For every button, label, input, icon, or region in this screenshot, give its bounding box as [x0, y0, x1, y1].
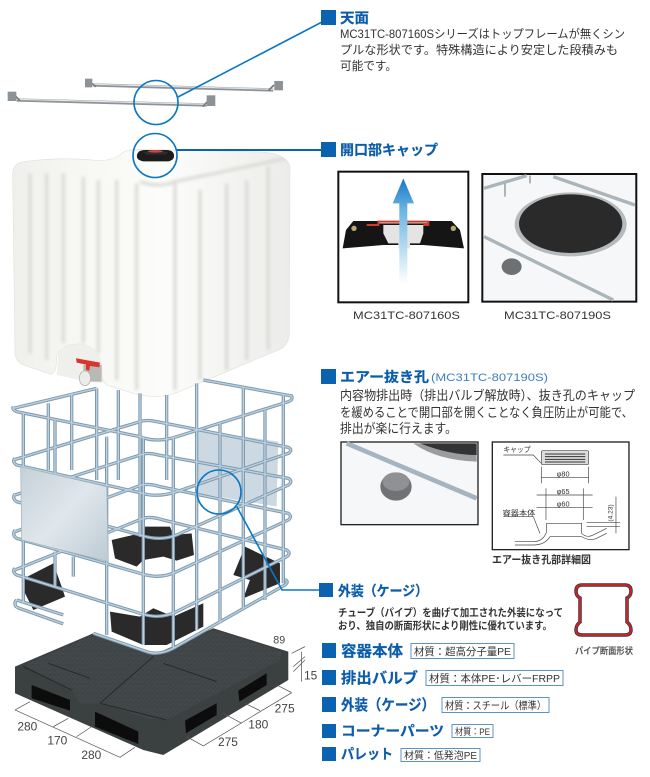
vent detail diagram: キャップ [503, 445, 531, 454]
dimension labels: 280 [17, 719, 38, 733]
spec: cage [322, 696, 549, 714]
air vent description [340, 388, 635, 436]
photo captions: MC31TC-807160S [353, 310, 460, 322]
pipe cross-section: パイプ断面形状 [575, 645, 633, 656]
dimension labels: 275 [275, 702, 295, 716]
vent detail diagram: (4.23) [608, 504, 615, 522]
corner parts [24, 527, 280, 645]
section: air vent: エアー抜き孔 [340, 369, 429, 385]
cage description: おり、独自の断面形状により剛性に優れています。 [338, 619, 552, 632]
air vent description: 排出が楽に行えます。 [340, 421, 457, 436]
section: cage: 外装（ケージ） [338, 583, 428, 599]
photo captions [353, 310, 611, 322]
section: top face: 天面 [340, 10, 369, 26]
dimension labels: 280 [81, 748, 102, 762]
section: air vent: (MC31TC-807190S) [431, 372, 548, 384]
dimension labels: 170 [47, 733, 68, 747]
up arrow [393, 178, 414, 283]
dimension labels: 89 [273, 634, 285, 646]
vent detail diagram [492, 442, 629, 550]
dimension lines [15, 647, 305, 757]
spec: corner parts: コーナーパーツ [341, 723, 444, 739]
section: top face [321, 10, 625, 73]
spec: drain valve [322, 669, 563, 687]
top frame rails [8, 79, 283, 107]
spec: container body: 容器本体 [341, 643, 403, 660]
photo captions: MC31TC-807190S [504, 310, 611, 322]
left side panel [21, 467, 108, 562]
air vent description: 内容物排出時（排出バルブ解放時）、抜き孔のキャップ [340, 388, 635, 403]
spec: container body: 材質：超高分子量PE [414, 645, 511, 658]
dimension labels: 275 [218, 735, 238, 749]
drain valve [76, 358, 102, 386]
callout circles and leader lines [133, 22, 322, 590]
spec: corner parts [322, 723, 493, 739]
dimension labels: 180 [248, 717, 269, 731]
photo: vent cap [341, 442, 478, 525]
container tank [13, 149, 290, 396]
spec: pallet [322, 746, 480, 762]
wire frame [13, 380, 292, 653]
diagram caption: エアー抜き孔部詳細図 [492, 553, 591, 566]
spec: cage: 材質：スチール（標準） [445, 699, 546, 712]
section: air vent [321, 369, 635, 436]
photo: large opening lid [482, 174, 636, 302]
spec: drain valve: 排出バルブ [341, 669, 418, 687]
cage description: チューブ（パイプ）を曲げて加工された外装になって [338, 606, 563, 619]
spec: corner parts: 材質：PE [455, 726, 490, 738]
vent detail diagram: φ65 [557, 487, 570, 496]
vent detail diagram: 容器本体 [503, 508, 536, 517]
right side panel [197, 430, 278, 507]
top face description [340, 26, 625, 73]
dimension labels: 15 [304, 668, 318, 682]
spec: drain valve: 材質：本体PE･レバーFRPP [429, 672, 560, 685]
opening cap [137, 150, 174, 161]
spec: container body [322, 643, 514, 660]
spec: cage: 外装（ケージ） [341, 696, 435, 714]
vent detail diagram: φ60 [557, 499, 570, 508]
top face description: プルな形状です。特殊構造により安定した段積みも [340, 42, 618, 57]
top face description: MC31TC-807160Sシリーズはトップフレームが無くシン [340, 26, 625, 41]
dimension labels [17, 634, 318, 762]
pallet [15, 628, 318, 762]
pipe cross-section [575, 585, 633, 656]
cage description [338, 606, 563, 632]
section: opening cap: 開口部キャップ [340, 142, 438, 158]
top face description: 可能です。 [340, 59, 397, 73]
cage [13, 380, 292, 653]
section: cage [319, 583, 563, 632]
spec: pallet: 材質：低発泡PE [404, 749, 477, 762]
vent detail diagram: φ80 [557, 470, 570, 479]
photo: cap cross-section [338, 172, 468, 302]
spec: pallet: パレット [341, 746, 393, 762]
